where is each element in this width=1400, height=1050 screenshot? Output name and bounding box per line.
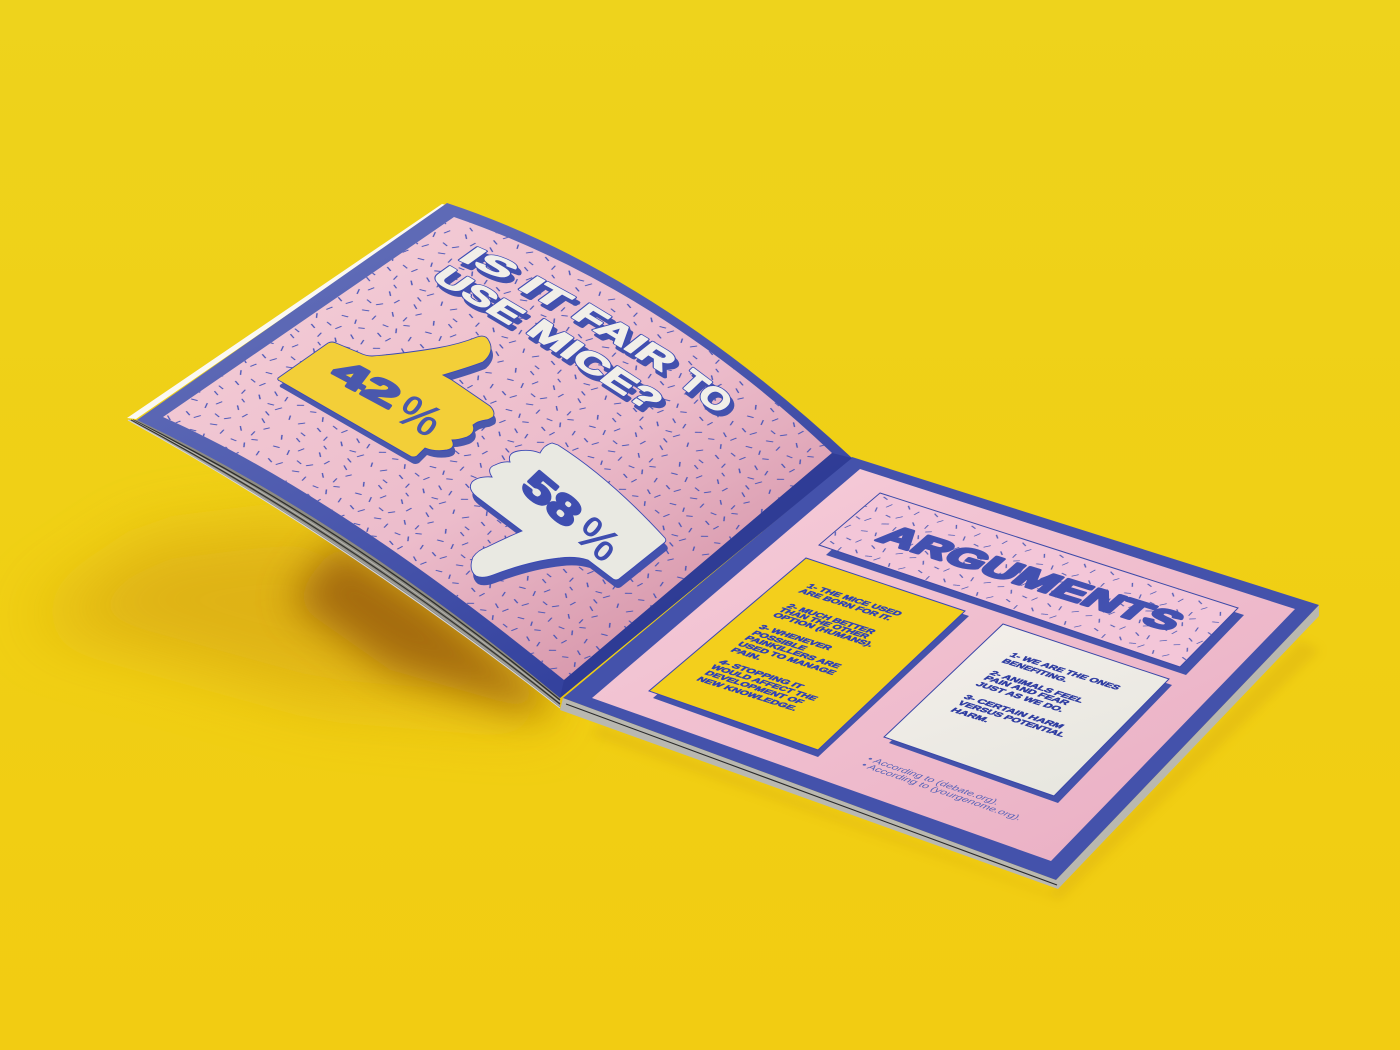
yellow card — [649, 558, 965, 750]
thumb up shadow — [280, 343, 496, 464]
yellow card shadow — [653, 563, 969, 757]
right page pink sheet — [592, 469, 1295, 861]
arguments banner — [819, 493, 1238, 667]
title word outlines — [424, 242, 740, 420]
title word outlines: USE — [424, 261, 534, 329]
list of arguments for: NEW KNOWLEDGE. — [694, 675, 801, 712]
left page confetti — [163, 217, 832, 680]
right page stack edge — [560, 605, 1319, 889]
title words: IT — [511, 271, 582, 315]
list of arguments for: 1- THE MICE USED — [804, 582, 905, 617]
title words: IS — [451, 242, 528, 284]
list of arguments for: WOULD AFFECT THE — [708, 663, 821, 702]
list of arguments against: BENEFITING. — [999, 657, 1071, 683]
title word outlines: MICE? — [520, 313, 671, 416]
heading text: ARGUMENTS — [869, 520, 1193, 637]
icon: thumbs up 42% — [278, 336, 496, 464]
left page blue border — [137, 203, 852, 698]
42 percent sign: % — [386, 387, 452, 446]
list of arguments for — [694, 582, 905, 712]
title word outlines: IT — [511, 271, 582, 315]
white page edge — [127, 204, 447, 419]
arguments banner shadow — [826, 500, 1244, 675]
list of arguments for: OPTION (HUMANS). — [770, 611, 877, 648]
spine shadow — [560, 453, 852, 698]
panel: yellow arguments for — [649, 558, 969, 757]
icon: thumbs down 58% — [470, 443, 668, 588]
title word shadows: TO — [675, 368, 743, 425]
footnote sources — [858, 755, 1025, 822]
title word outlines: IS — [451, 242, 528, 284]
list of arguments against: VERSUS POTENTIAL — [955, 699, 1068, 738]
white card — [884, 624, 1169, 796]
list of arguments for: THAN THE OTHER — [776, 606, 872, 640]
title words: TO — [672, 363, 740, 420]
title word shadows: USE — [427, 266, 537, 334]
panel: right page — [563, 457, 1319, 880]
panel: arguments heading — [819, 493, 1244, 675]
list of arguments against: 2- ANIMALS FEEL — [987, 669, 1087, 704]
arguments banner confetti — [819, 493, 1238, 667]
list of arguments against: PAIN AND FEAR — [981, 674, 1072, 706]
list of arguments against: HARM. — [948, 706, 993, 724]
list of arguments for: 2- MUCH BETTER — [784, 602, 878, 635]
title words: USE — [424, 261, 534, 329]
list of arguments for: POSSIBLE — [749, 629, 810, 652]
ground shadow — [30, 520, 1320, 900]
list of arguments for: 4- STOPPING IT — [716, 658, 808, 690]
58 figure: 58 — [513, 463, 590, 536]
list of arguments against: 1- WE ARE THE ONES — [1007, 651, 1124, 691]
title word shadows: FAIR — [568, 303, 688, 382]
list of arguments for: ARE BORN FOR IT. — [796, 587, 895, 622]
panel: white arguments against — [884, 624, 1172, 803]
list of arguments for: PAIN. — [728, 646, 765, 661]
white card shadow — [889, 630, 1172, 803]
list of arguments for: DEVELOPMENT OF — [702, 669, 807, 705]
left page stack edge — [128, 420, 560, 708]
thumb up shape — [278, 336, 494, 457]
list of arguments for: PAINKILLERS ARE — [742, 634, 844, 670]
footnote sources: • According to (debate.org). — [864, 755, 1003, 807]
list of arguments against: 3- CERTAIN HARM — [961, 693, 1067, 730]
title words: MICE? — [520, 313, 671, 416]
42 figure: 42 — [324, 352, 408, 416]
list of arguments for: 3- WHENEVER — [756, 623, 835, 651]
title word shadows: MICE? — [523, 318, 674, 421]
title word outlines: FAIR — [565, 298, 685, 377]
thumb down shape — [470, 443, 666, 580]
title word outlines: TO — [672, 363, 740, 420]
right page blue border — [563, 457, 1319, 880]
title words — [424, 242, 740, 420]
thumb down shadow — [472, 451, 668, 588]
title word shadows: IS — [454, 247, 531, 289]
title words: FAIR — [565, 298, 685, 377]
list of arguments against — [948, 651, 1124, 738]
58 percent sign: % — [566, 507, 630, 571]
left page pink sheet — [163, 217, 832, 680]
title — [424, 242, 743, 425]
footnote sources: • According to (yourgenome.org). — [858, 761, 1025, 822]
panel: left page — [127, 203, 852, 698]
title word shadows — [427, 247, 743, 425]
list of arguments for: USED TO MANAGE — [735, 640, 839, 676]
list of arguments against: JUST AS WE DO. — [973, 680, 1067, 713]
title word shadows: IT — [514, 276, 585, 320]
